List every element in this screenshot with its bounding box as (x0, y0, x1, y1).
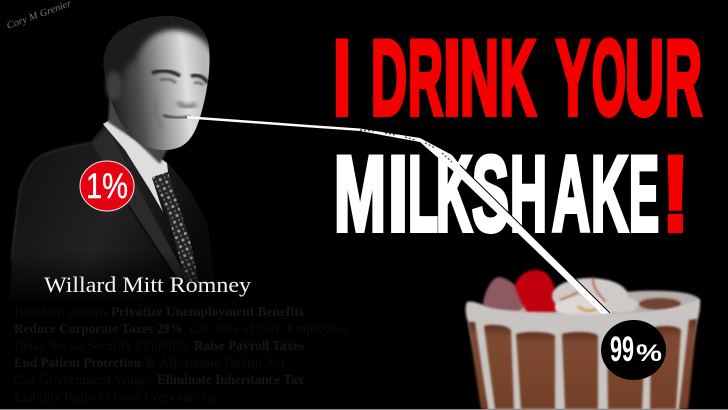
suit jacket (10, 121, 216, 300)
chocolate surface (639, 298, 681, 310)
title line 2: ! (662, 134, 689, 254)
policy list: Breakup unions (14, 304, 108, 319)
policy list: Cut 10% of Gov. Employees (190, 321, 348, 336)
bottom edge (0, 409, 728, 410)
title line 1: O (592, 18, 626, 138)
title line 2: E (629, 134, 659, 254)
title line 2: A (552, 134, 590, 254)
policy list: End Patient Protection (14, 355, 141, 370)
lower fade (0, 250, 240, 305)
title line 2: S (472, 134, 509, 254)
cup body (466, 299, 700, 410)
title line 1: R (408, 18, 443, 138)
policy list: Reduce Corporate Taxes 29% (14, 321, 183, 336)
whipped cream (552, 277, 638, 318)
neck (108, 95, 178, 164)
badge: 1% (80, 161, 134, 211)
title line 2: I (388, 134, 408, 254)
brows (152, 71, 180, 76)
nose shadow (178, 102, 196, 107)
title line 2: M (334, 134, 386, 254)
policy list (14, 304, 348, 404)
policy list: Privatize Unemployment Benefits (111, 304, 304, 319)
shirt collar (103, 120, 168, 212)
title line 2: H (510, 134, 547, 254)
title line 2: K (436, 134, 472, 254)
title line 1: Y (556, 18, 590, 138)
tie (152, 172, 199, 282)
policy list: Eliminate Inheritance Tax (157, 372, 304, 387)
mouth (163, 115, 190, 118)
pink strawberry (483, 277, 525, 311)
badge: 99%: 99 (610, 330, 634, 369)
name heading: Willard Mitt Romney (44, 272, 251, 297)
lapel highlight (92, 127, 185, 280)
badge: 99%: % (636, 340, 662, 367)
title line 1: I (333, 18, 351, 138)
policy list: Liability Rules to favor Corporations (14, 389, 216, 404)
title line 2 (334, 134, 689, 254)
signature: Cory M Grenier (5, 0, 73, 32)
eyes (160, 79, 203, 85)
shoulder rim light (11, 142, 90, 262)
title line 1: N (460, 18, 499, 138)
back rim (480, 291, 700, 325)
hair (109, 16, 210, 81)
title line 2: L (408, 134, 438, 254)
title line 1: K (500, 18, 536, 138)
brown panels (468, 319, 697, 409)
title line 1: U (625, 18, 664, 138)
straw (187, 116, 610, 314)
policy list: Raise Payroll Taxes (194, 338, 304, 353)
policy list: Cut Government Wages (14, 372, 153, 387)
title line 1: D (371, 18, 407, 138)
milkshake cup (466, 270, 700, 410)
policy list: Delay Social Security Eligibility (14, 338, 190, 353)
policy list: & Affordable Health Act (145, 355, 285, 370)
title line 1: I (443, 18, 461, 138)
head shading (109, 16, 210, 150)
cheek crease (155, 98, 163, 128)
title line 2: K (591, 134, 628, 254)
title line 1 (333, 18, 702, 138)
badge: 1%: 1% (86, 167, 128, 206)
ear (106, 71, 122, 101)
badge: 99% (601, 320, 666, 380)
head (104, 16, 210, 150)
red strawberry (515, 270, 556, 312)
portrait: Willard Mitt Romney (10, 16, 212, 292)
